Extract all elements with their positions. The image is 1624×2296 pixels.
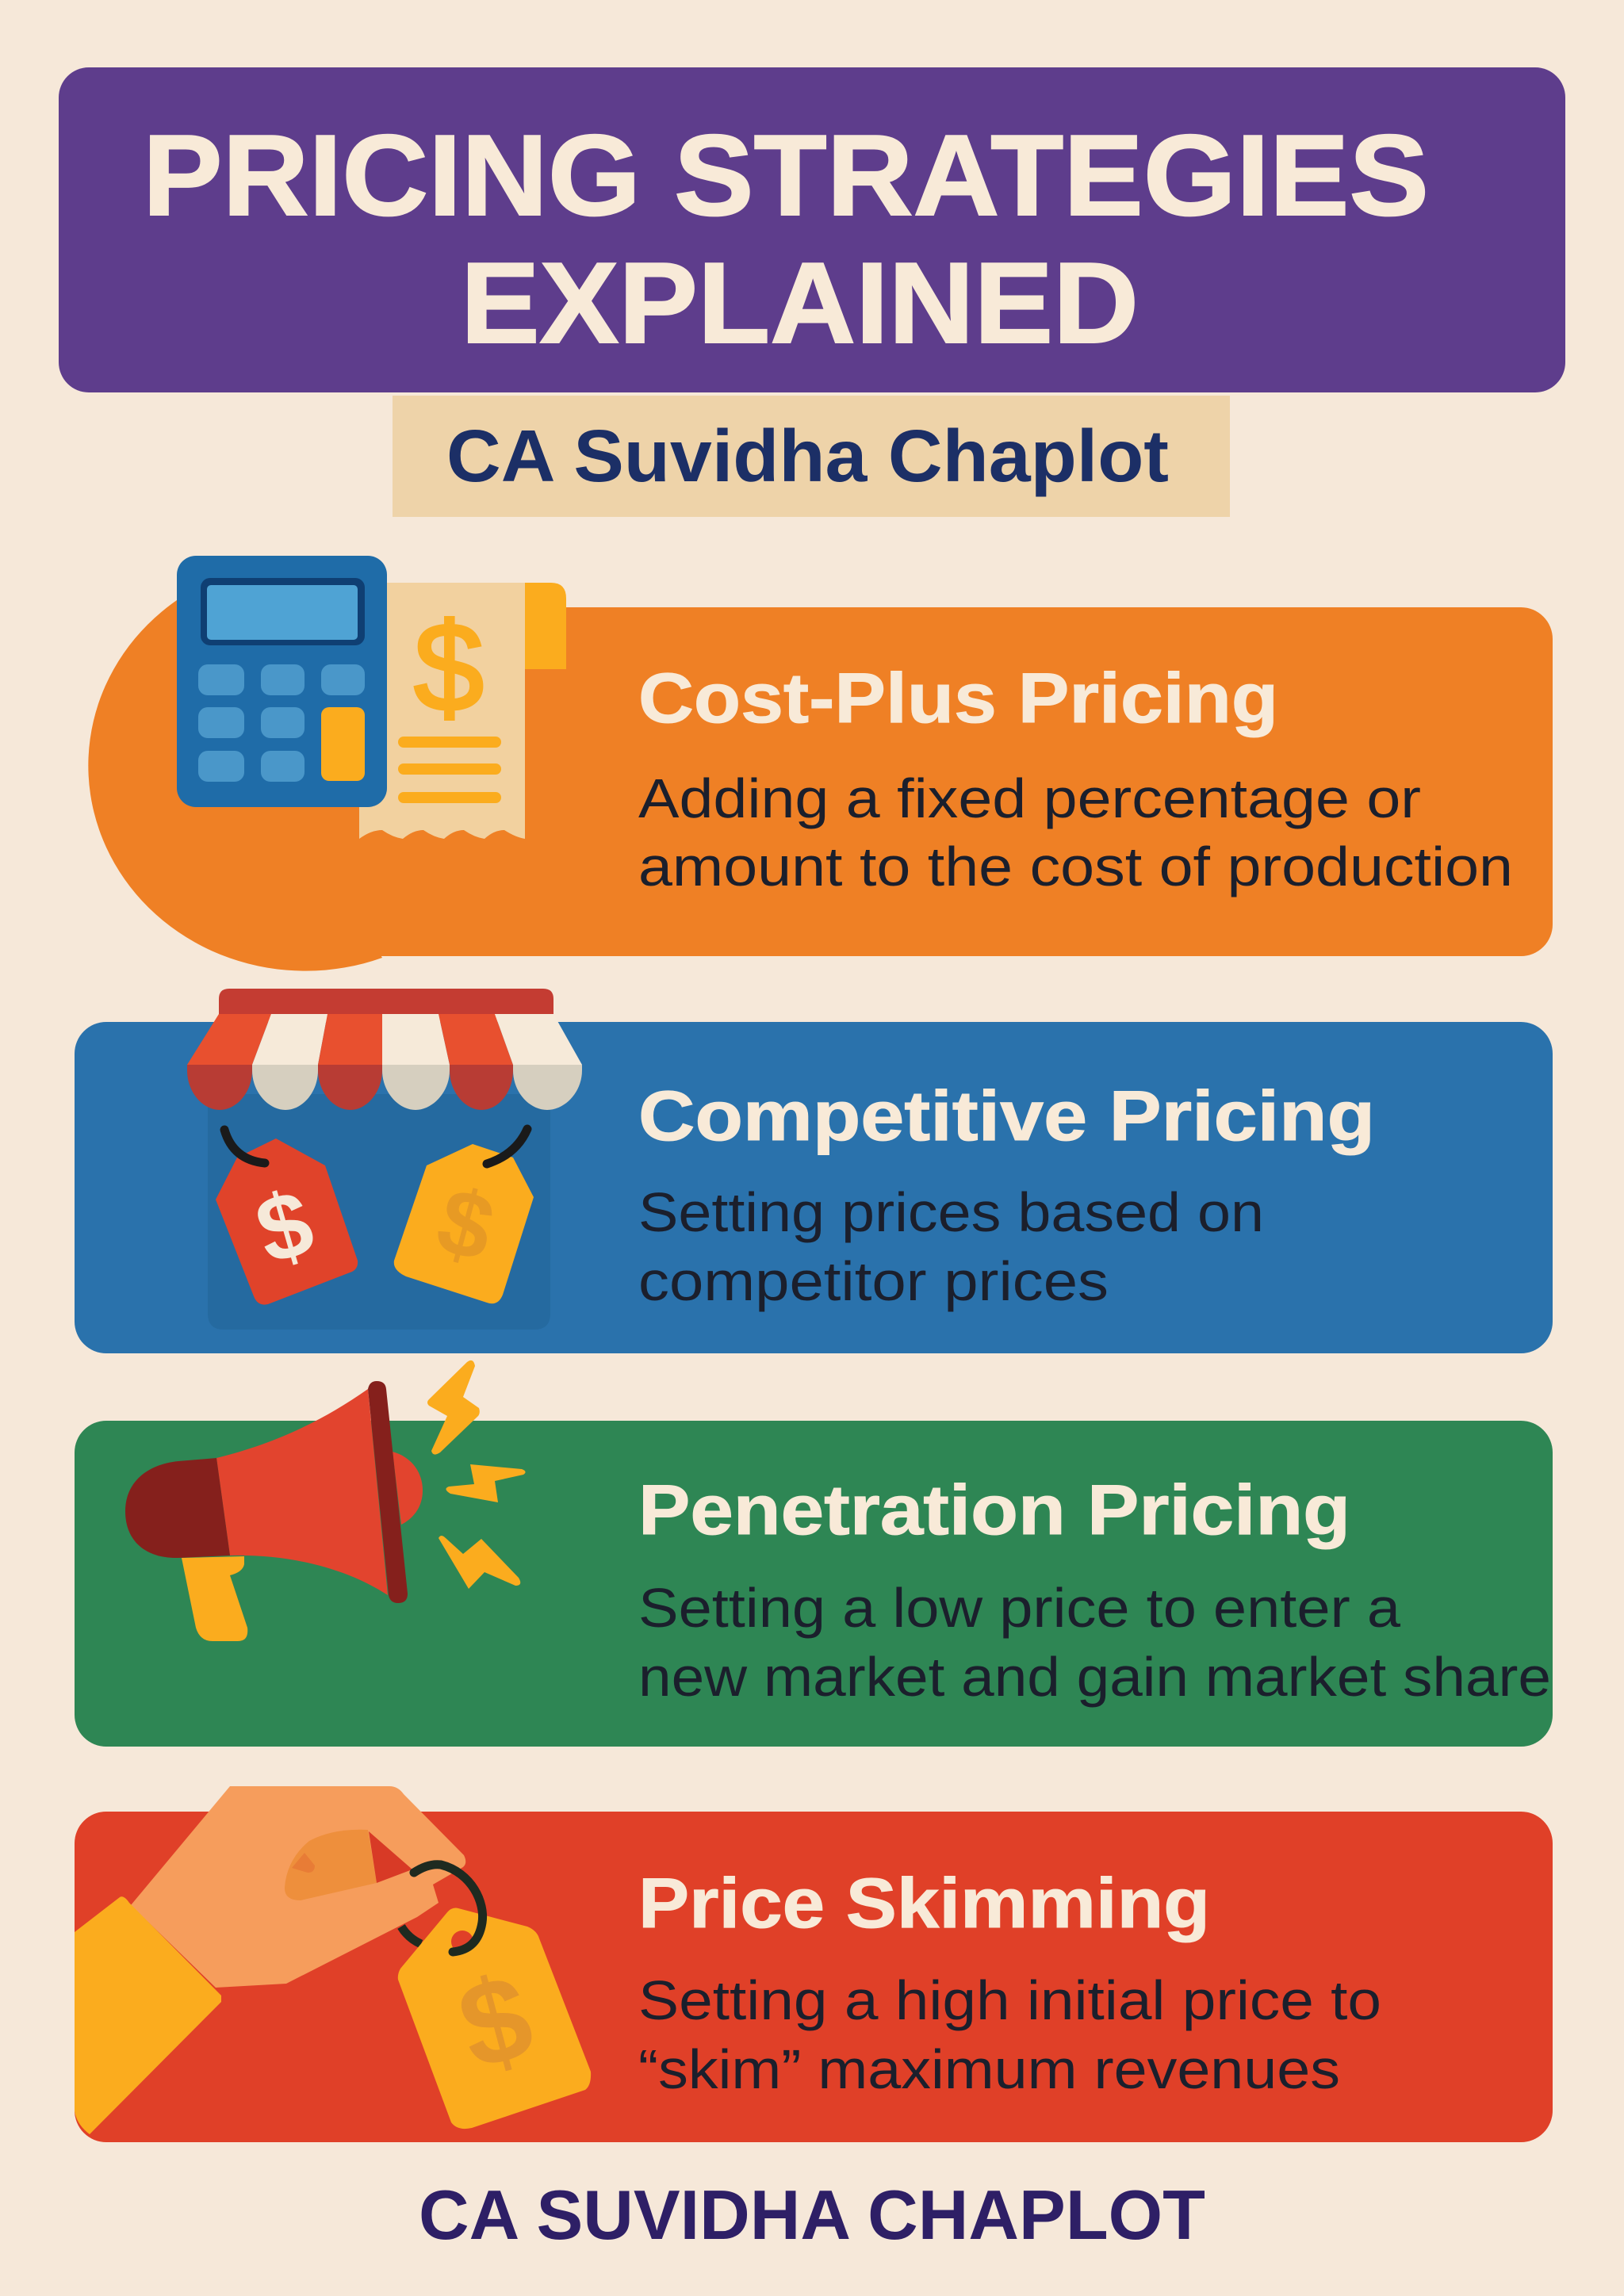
orange card background bbox=[88, 600, 1553, 971]
panel: cost-plus pricing bbox=[88, 556, 1553, 971]
icon: shop with price tags bbox=[187, 989, 582, 1330]
heading: penetration pricing: Penetration Pricing bbox=[638, 1470, 1350, 1549]
description: competitive pricing: competitor prices bbox=[638, 1250, 1109, 1312]
subtitle ribbon: CA Suvidha Chaplot bbox=[446, 415, 1169, 497]
red price tag: $ bbox=[245, 1170, 324, 1284]
panel: penetration pricing bbox=[75, 1360, 1553, 1747]
red price tag bbox=[216, 1130, 358, 1305]
yellow price tag bbox=[394, 1129, 534, 1303]
panel: price skimming bbox=[75, 1786, 1553, 2142]
tag ring bbox=[414, 1865, 483, 1952]
description: penetration pricing: Setting a low price to enter a bbox=[638, 1577, 1400, 1639]
heading: price skimming: Price Skimming bbox=[638, 1863, 1210, 1942]
title text bbox=[143, 111, 1429, 367]
title text: PRICING STRATEGIES bbox=[143, 111, 1429, 239]
description: price skimming bbox=[638, 1969, 1381, 2100]
description: competitive pricing bbox=[638, 1181, 1264, 1312]
icon: receipt bbox=[359, 583, 566, 839]
blue card background bbox=[75, 1022, 1553, 1353]
icon: hand holding price tag bbox=[75, 1786, 591, 2134]
description: competitive pricing: Setting prices based on bbox=[638, 1181, 1264, 1243]
green card background bbox=[75, 1421, 1553, 1747]
description: penetration pricing: new market and gain market share bbox=[638, 1646, 1551, 1708]
title banner bbox=[59, 67, 1565, 392]
red card background bbox=[75, 1812, 1553, 2142]
icon: hand holding price tag: $ bbox=[446, 1948, 546, 2095]
yellow price tag: $ bbox=[427, 1168, 504, 1282]
icon: sound bolts bbox=[427, 1360, 526, 1589]
description: penetration pricing bbox=[638, 1577, 1551, 1708]
title text: EXPLAINED bbox=[461, 239, 1139, 367]
icon: calculator bbox=[177, 556, 387, 807]
icon: receipt: $ bbox=[414, 598, 484, 737]
hand bbox=[131, 1786, 465, 1988]
description: cost-plus pricing: amount to the cost of production bbox=[638, 836, 1513, 897]
footer author name: CA SUVIDHA CHAPLOT bbox=[419, 2175, 1205, 2254]
description: cost-plus pricing bbox=[638, 767, 1513, 897]
description: price skimming: “skim” maximum revenues bbox=[638, 2038, 1340, 2100]
heading: cost-plus pricing: Cost-Plus Pricing bbox=[638, 658, 1278, 737]
price tag bbox=[398, 1908, 591, 2129]
subtitle ribbon bbox=[393, 396, 1230, 517]
heading: competitive pricing: Competitive Pricing bbox=[638, 1076, 1375, 1155]
description: cost-plus pricing: Adding a fixed percentage or bbox=[638, 767, 1421, 829]
sleeve bbox=[75, 1896, 221, 2134]
panel: competitive pricing bbox=[75, 989, 1553, 1353]
description: price skimming: Setting a high initial price to bbox=[638, 1969, 1381, 2031]
icon: megaphone bbox=[125, 1360, 526, 1641]
